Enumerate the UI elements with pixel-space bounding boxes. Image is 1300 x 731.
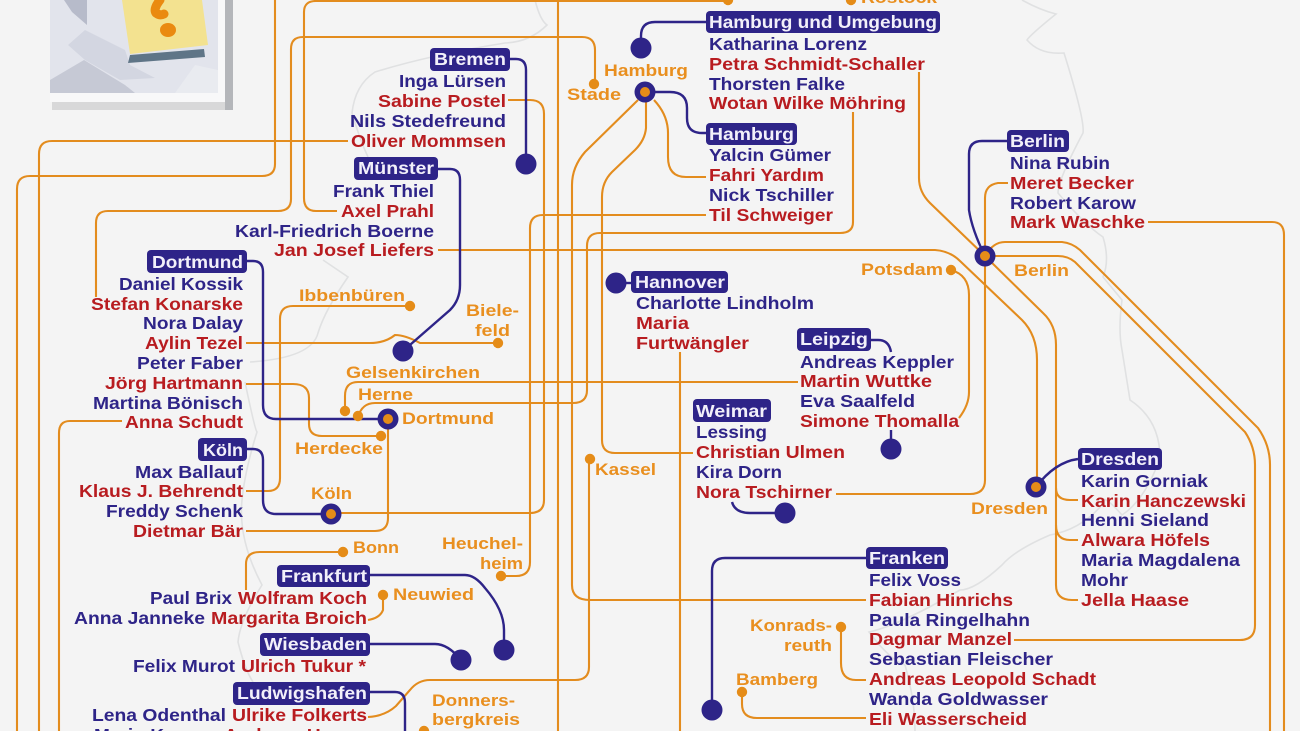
panel: Franken: Fabian Hinrichs [869, 590, 1013, 610]
panel: Frankfurt: Margarita Broich [211, 608, 367, 628]
panel: Hannover [631, 271, 814, 353]
panel: Münster: Frank Thiel [333, 181, 434, 201]
panel: Leipzig [797, 328, 959, 431]
orange place names: Neuwied [393, 585, 474, 604]
panel: Franken: Felix Voss [869, 570, 961, 590]
panel: Weimar: Lessing [696, 422, 767, 442]
panel: Franken: Franken [869, 548, 945, 568]
panel: Dresden: Henni Sieland [1081, 510, 1209, 530]
panel: Dresden: Maria Magdalena [1081, 550, 1240, 570]
panel: Weimar: Nora Tschirner [696, 482, 832, 502]
panel: Dortmund: Jörg Hartmann [105, 373, 243, 393]
panel: Berlin: Nina Rubin [1010, 153, 1110, 173]
panel: Münster: Münster [358, 158, 434, 178]
panel: Berlin [1007, 130, 1145, 232]
orange place names: reuth [784, 636, 832, 655]
orange place names: Herne [358, 385, 413, 404]
panel: Leipzig: Martin Wuttke [800, 371, 932, 391]
panel: Frankfurt: Paul Brix [150, 588, 232, 608]
orange place names: Berlin [1014, 261, 1069, 280]
panel: Weimar: Weimar [696, 401, 767, 421]
panel: Wiesbaden: Wiesbaden [264, 634, 367, 654]
panel: Dortmund: Dortmund [152, 252, 243, 272]
orange place names: Donners- [432, 691, 515, 710]
panel: Hamburg: Hamburg [709, 124, 794, 144]
panel: Frankfurt: Frankfurt [281, 566, 367, 586]
orange place names: Herdecke [295, 439, 383, 458]
orange place names: Gelsenkirchen [346, 363, 480, 382]
panel: Dresden: Karin Hanczewski [1081, 491, 1246, 511]
navy location dots [392, 38, 902, 720]
panel: Köln: Freddy Schenk [106, 501, 243, 521]
panel: Hamburg und Umgebung: Petra Schmidt-Schaller [709, 54, 925, 74]
panel: Franken: Paula Ringelhahn [869, 610, 1030, 630]
panel: Dortmund: Peter Faber [137, 353, 243, 373]
panel: Ludwigshafen [92, 682, 370, 731]
panel: Weimar [693, 399, 845, 502]
panel: Hamburg und Umgebung: Thorsten Falke [709, 74, 845, 94]
orange place names: Ibbenbüren [299, 286, 405, 305]
panel: Dortmund [91, 250, 247, 432]
panel: Köln: Klaus J. Behrendt [79, 481, 243, 501]
panel: Dortmund: Aylin Tezel [145, 333, 243, 353]
panel: Frankfurt [74, 565, 370, 628]
panel: Berlin: Mark Waschke [1010, 212, 1145, 232]
orange place names: Dortmund [402, 409, 494, 428]
panel: Franken: Eli Wasserscheid [869, 709, 1027, 729]
panel: Köln: Max Ballauf [135, 462, 243, 482]
navy connector lines: city to location [247, 22, 1078, 731]
panel: Wiesbaden: Felix Murot [133, 656, 235, 676]
panel: Bremen: Nils Stedefreund [350, 111, 506, 131]
orange place names: heim [480, 554, 523, 573]
orange place names: Bonn [353, 538, 399, 557]
panel: Hamburg und Umgebung: Hamburg und Umgebung [709, 12, 937, 32]
panel: Münster: Axel Prahl [341, 201, 434, 221]
orange place names: Dresden [971, 499, 1048, 518]
panel: Hamburg und Umgebung: Wotan Wilke Möhring [709, 93, 906, 113]
panel: Leipzig: Leipzig [800, 329, 868, 349]
panel: Dortmund: Anna Schudt [125, 412, 243, 432]
panel: Berlin: Meret Becker [1010, 173, 1134, 193]
panel: Leipzig: Simone Thomalla [800, 411, 959, 431]
panel: Berlin: Berlin [1010, 131, 1065, 151]
orange place names: Heuchel- [442, 534, 523, 553]
panel: Hannover: Furtwängler [636, 333, 749, 353]
panel: Köln: Köln [203, 440, 243, 460]
panel: Ludwigshafen: Ulrike Folkerts [232, 705, 367, 725]
orange place names: Kassel [595, 460, 656, 479]
panel: Weimar: Kira Dorn [696, 462, 782, 482]
map outline of Germany [238, 0, 1160, 731]
orange place names: feld [475, 321, 510, 340]
panel: Köln: Dietmar Bär [133, 521, 243, 541]
orange place names: Stade [567, 85, 621, 104]
orange place names: bergkreis [432, 710, 520, 729]
panel: Dresden: Alwara Höfels [1081, 530, 1210, 550]
panel: Dresden: Karin Gorniak [1081, 471, 1208, 491]
orange place names: Bamberg [736, 670, 818, 689]
orange place names: Köln [311, 484, 352, 503]
panel: Leipzig: Andreas Keppler [800, 352, 954, 372]
panel: Dortmund: Stefan Konarske [91, 294, 243, 314]
panel: Hannover: Charlotte Lindholm [636, 293, 814, 313]
panel: Bremen: Inga Lürsen [399, 71, 506, 91]
panel: Hamburg: Fahri Yardım [709, 165, 824, 185]
panel: Bremen: Sabine Postel [378, 91, 506, 111]
panel: Bremen: Oliver Mommsen [351, 131, 506, 151]
panel: Hamburg und Umgebung: Katharina Lorenz [709, 34, 867, 54]
panel: Hamburg [706, 123, 834, 225]
panel: Hamburg: Nick Tschiller [709, 185, 834, 205]
panel: Dortmund: Martina Bönisch [93, 393, 243, 413]
panel: Ludwigshafen: Ludwigshafen [237, 683, 367, 703]
panel: Ludwigshafen: Lena Odenthal [92, 705, 226, 725]
panel: Dresden: Jella Haase [1081, 590, 1189, 610]
panel: Wiesbaden [133, 633, 370, 676]
orange place names: Konrads- [750, 616, 832, 635]
panel: Dresden: Mohr [1081, 570, 1128, 590]
panel: Münster [235, 157, 438, 260]
panel: Berlin: Robert Karow [1010, 193, 1136, 213]
panel: Hamburg und Umgebung [706, 11, 940, 113]
panel: Franken: Andreas Leopold Schadt [869, 669, 1096, 689]
panel: Münster: Karl-Friedrich Boerne [235, 221, 434, 241]
orange place names: Biele- [466, 301, 519, 320]
panel: Bremen: Bremen [434, 49, 506, 69]
panel: Hannover: Maria [636, 313, 689, 333]
panel: Hamburg: Til Schweiger [709, 205, 833, 225]
panel: Dortmund: Nora Dalay [143, 313, 243, 333]
panel: Bremen [350, 48, 510, 151]
panel: Frankfurt: Wolfram Koch [238, 588, 367, 608]
panel: Hamburg: Yalcin Gümer [709, 145, 831, 165]
panel: Münster: Jan Josef Liefers [274, 240, 434, 260]
panel: Franken: Dagmar Manzel [869, 629, 1012, 649]
ring interchange stations [320, 82, 1046, 524]
panel: Franken: Wanda Goldwasser [869, 689, 1048, 709]
orange place names: Potsdam [861, 260, 943, 279]
panel: Hannover: Hannover [635, 272, 725, 292]
panel: Wiesbaden: Ulrich Tukur * [241, 656, 366, 676]
panel: Dresden [1078, 448, 1246, 610]
small orange place dots [338, 0, 956, 731]
panel: Dortmund: Daniel Kossik [119, 274, 243, 294]
panel: Franken [866, 547, 1096, 729]
orange place names [295, 0, 1069, 729]
sketch note image [50, 0, 233, 110]
panel: Dresden: Dresden [1081, 449, 1159, 469]
orange place names: Hamburg [604, 61, 688, 80]
panel: Köln [79, 438, 247, 541]
panel: Frankfurt: Anna Janneke [74, 608, 205, 628]
panel: Leipzig: Eva Saalfeld [800, 391, 915, 411]
panel: Franken: Sebastian Fleischer [869, 649, 1053, 669]
panel: Weimar: Christian Ulmen [696, 442, 845, 462]
